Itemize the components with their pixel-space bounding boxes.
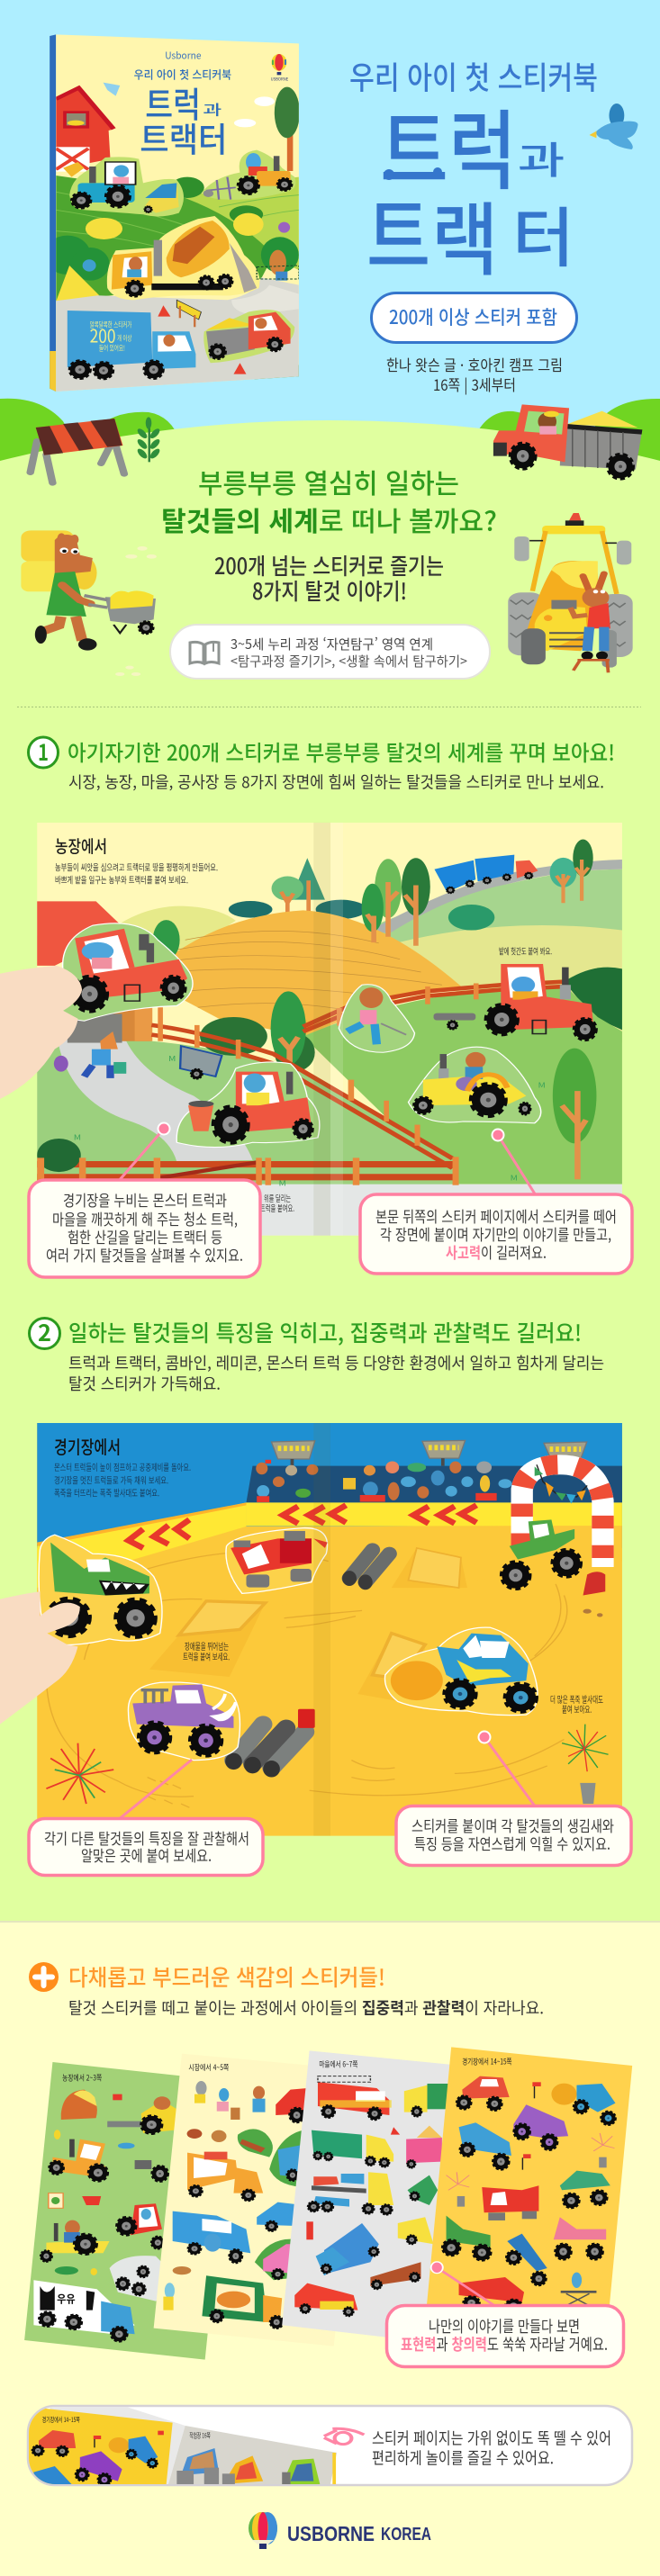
book cover: 트랙터 bbox=[140, 113, 227, 162]
book cover bbox=[44, 34, 303, 393]
subheading bbox=[214, 549, 444, 607]
photo: sticker pages: 경기장에서 14~15쪽 bbox=[42, 2415, 80, 2424]
callout arrow: right bbox=[479, 1732, 536, 1807]
panel: section 2 bbox=[0, 1316, 631, 1876]
book cover: Usborne bbox=[165, 48, 201, 62]
text: no scissors bbox=[372, 2427, 611, 2470]
main title: tractor: 트 bbox=[366, 171, 430, 291]
sticker 2 bbox=[176, 1062, 320, 1148]
callout: left text: 험한 산길을 달리는 트랙터 등 bbox=[68, 1225, 222, 1247]
sheet: farm: 농장에서 2~3쪽 bbox=[62, 2073, 102, 2084]
illustration: dog with wheelbarrow bbox=[21, 530, 157, 676]
background: sky bbox=[0, 0, 660, 477]
main title: tractor bbox=[366, 171, 574, 292]
book spread: farm: M bbox=[278, 1177, 286, 1188]
badge: 200+ stickers bbox=[371, 293, 576, 342]
logo: Usborne Korea: USBORNE bbox=[287, 2522, 375, 2545]
book cover: 과 bbox=[203, 99, 222, 119]
sticker 1 bbox=[61, 923, 194, 1022]
sticker: purple rhino bbox=[128, 1682, 240, 1761]
sheet: stadium bbox=[427, 2047, 632, 2304]
badge: 200+ stickers: 200개 이상 스티커 포함 bbox=[389, 303, 557, 330]
text: no scissors: 스티커 페이지는 가위 없이도 똑 뗄 수 있어 bbox=[372, 2427, 611, 2450]
callout: curriculum link bbox=[170, 625, 490, 679]
sticker: dump blue bbox=[384, 1627, 538, 1716]
background: left and right hills bbox=[0, 399, 660, 468]
book spread: stadium: 몬스터 트럭들이 높이 점프하고 공중제비를 돌아요. bbox=[54, 1460, 191, 1473]
sheet: market: 시장에서 4~5쪽 bbox=[188, 2062, 230, 2073]
icon: dump truck bbox=[493, 404, 642, 479]
callout: right text: 사고력이 길러져요. bbox=[446, 1240, 547, 1263]
book cover: 트럭 bbox=[145, 77, 201, 128]
number badge 2: 2 bbox=[38, 1316, 51, 1348]
heading: intro: 탈것들의 세계로 떠나 볼까요? bbox=[161, 500, 497, 539]
sticker: red truck bbox=[226, 1528, 328, 1593]
heading 1: 아기자기한 200개 스티커로 부릉부릉 탈것의 세계를 꾸며 보아요! bbox=[68, 735, 615, 767]
callout: left text: 각기 다른 탈것들의 특징을 잘 관찰해서 bbox=[44, 1826, 249, 1849]
book spread: stadium: 트럭을 붙여 보세요. bbox=[183, 1649, 230, 1663]
callout: right text: 본문 뒤쪽의 스티커 페이지에서 스티커를 떼어 bbox=[375, 1204, 617, 1227]
sticker 4 bbox=[408, 1047, 541, 1123]
icon: balloon bbox=[249, 2512, 277, 2549]
subheading: 8가지 탈것 이야기! bbox=[252, 574, 407, 607]
panel: section 1 bbox=[0, 735, 632, 1277]
background: cream page bbox=[0, 1921, 660, 2576]
callout: left text: 경기장을 누비는 몬스터 트럭과 bbox=[63, 1188, 227, 1211]
credits bbox=[386, 353, 563, 395]
logo: Usborne Korea: KOREA bbox=[381, 2525, 431, 2544]
description 2: 탈것 스티커가 가득해요. bbox=[68, 1372, 221, 1395]
icon: plant bbox=[136, 417, 161, 462]
callout: curriculum link: <탐구과정 즐기기>, <생활 속에서 탐구하기> bbox=[231, 652, 467, 671]
icon: pink scribble arrow bbox=[324, 2428, 364, 2445]
main title: truck and: 과 bbox=[518, 131, 565, 185]
sticker sheets bbox=[24, 2047, 632, 2360]
book spread: stadium: 폭죽을 터뜨리는 폭죽 발사대도 붙여요. bbox=[54, 1485, 159, 1500]
panel: hero bbox=[44, 34, 638, 395]
book cover: USBORNE bbox=[271, 76, 288, 82]
sheet: town: 마을에서 6~7쪽 bbox=[319, 2059, 358, 2070]
panel: peel-off pages bbox=[27, 2406, 632, 2486]
series title: 우리 아이 첫 스티커북 bbox=[349, 53, 598, 99]
book cover: 200 bbox=[90, 322, 116, 348]
hand bbox=[0, 966, 82, 1099]
book spread: farm: M bbox=[538, 1079, 546, 1090]
callout: left text: 마을을 깨끗하게 해 주는 청소 트럭, bbox=[52, 1207, 238, 1229]
callout: left text bbox=[29, 1180, 260, 1277]
callout: left text bbox=[29, 1818, 263, 1876]
callout: right text: 스티커를 붙이며 각 탈것들의 생김새와 bbox=[411, 1814, 614, 1836]
panel: stickers section bbox=[24, 1960, 632, 2549]
description 1: 시장, 농장, 마을, 공사장 등 8가지 장면에 힘써 일하는 탈것들을 스티커로 만나 보세요. bbox=[68, 770, 604, 794]
text: no scissors: 편리하게 놀이를 즐길 수 있어요. bbox=[372, 2446, 554, 2470]
sheet: farm bbox=[24, 2062, 208, 2360]
credits: 한나 왓슨 글 · 호아킨 캠프 그림 bbox=[386, 353, 563, 375]
description 2 bbox=[68, 1351, 604, 1395]
callout: expressive skills: 표현력과 창의력도 쑥쑥 자라날 거예요. bbox=[401, 2333, 608, 2355]
panel: intro bbox=[21, 404, 642, 679]
book spread: farm bbox=[0, 823, 622, 1236]
icon: open book bbox=[190, 642, 219, 663]
book spread: farm: 농장에서 bbox=[55, 833, 107, 858]
icon: orange plus bbox=[29, 1962, 59, 1992]
book spread: farm: 트럭을 붙여요. bbox=[260, 1202, 294, 1214]
callout: curriculum link: 3~5세 누리 과정 ‘자연탐구’ 영역 연계 bbox=[231, 635, 433, 653]
heading: intro: 부릉부릉 열심히 일하는 bbox=[198, 462, 459, 501]
background: green page bbox=[0, 420, 660, 1921]
book spread: farm: 농부들이 씨앗을 심으려고 트랙터로 땅을 평평하게 만들어요. bbox=[55, 860, 218, 873]
callout arrow: left bbox=[118, 1760, 192, 1820]
book spread: farm: 위를 달리는 bbox=[264, 1192, 291, 1204]
book spread: stadium: 붙여 보아요. bbox=[562, 1702, 592, 1716]
book cover: 알록달록한 스티커가 bbox=[90, 319, 131, 329]
callout: right text bbox=[360, 1194, 632, 1274]
book spread: stadium: 경기장에서 bbox=[54, 1433, 121, 1459]
sheet: stadium: 경기장에서 14~15쪽 bbox=[462, 2056, 512, 2067]
description 2: 트럭과 트랙터, 콤바인, 레미콘, 몬스터 트럭 등 다양한 환경에서 일하고 힘차게 달리는 bbox=[68, 1351, 604, 1374]
heading: stickers: 다채롭고 부드러운 색감의 스티커들! bbox=[68, 1960, 385, 1993]
callout: right text: 각 장면에 붙이며 자기만의 이야기를 만들고, bbox=[380, 1222, 611, 1245]
book spread: stadium: 경기장을 멋진 트럭들로 가득 채워 보세요. bbox=[54, 1473, 168, 1487]
photo: sticker pages bbox=[27, 2407, 337, 2486]
book spread: farm: M bbox=[511, 1172, 518, 1183]
book spread: farm: 바쁘게 밭을 일구는 농부와 트랙터를 붙여 보세요. bbox=[55, 873, 188, 886]
number badge 2 bbox=[29, 1316, 59, 1348]
callout arrow: left bbox=[118, 1123, 169, 1182]
credits: 16쪽 | 3세부터 bbox=[433, 373, 516, 395]
description: stickers: 탈것 스티커를 떼고 붙이는 과정에서 아이들의 집중력과 관찰력이 자라나요. bbox=[68, 1996, 544, 2020]
book cover: 개 이상 bbox=[117, 332, 131, 343]
icon: blue bird bbox=[589, 104, 638, 149]
logo: Usborne Korea bbox=[249, 2512, 431, 2549]
book spread: farm: 밭에 헛간도 붙여 봐요. bbox=[499, 945, 552, 958]
book spread: stadium: 장애물을 뛰어넘는 bbox=[185, 1639, 229, 1653]
main title: tractor: 터 bbox=[512, 187, 574, 281]
callout: left text: 알맞은 곳에 붙여 보세요. bbox=[81, 1843, 212, 1866]
icon: road barrier bbox=[31, 419, 124, 483]
sticker 3 bbox=[339, 985, 414, 1052]
sticker: green croc bbox=[39, 1535, 162, 1644]
book spread: stadium bbox=[0, 1423, 622, 1836]
book cover: 들어 있어요! bbox=[99, 342, 125, 353]
number badge 1 bbox=[29, 735, 58, 768]
main title: tractor: 랙 bbox=[431, 177, 498, 292]
sheet: market bbox=[153, 2063, 306, 2333]
book cover: 우리 아이 첫 스티커북 bbox=[134, 67, 231, 83]
heading: intro bbox=[161, 462, 497, 539]
callout: expressive skills bbox=[387, 2306, 623, 2367]
callout: expressive skills: 나만의 이야기를 만들다 보면 bbox=[429, 2315, 580, 2337]
arrow: sticker pointer bbox=[431, 2262, 494, 2306]
sheet: town bbox=[282, 2050, 450, 2337]
hand 2 bbox=[0, 1591, 80, 1725]
illustration: yellow tractor and rabbit bbox=[508, 513, 633, 672]
subheading: 200개 넘는 스티커로 즐기는 bbox=[214, 549, 444, 581]
callout: right text: 특징 등을 자연스럽게 익힐 수 있지요. bbox=[414, 1832, 610, 1854]
sheet: farm: 우유 bbox=[57, 2291, 76, 2306]
heading 2: 일하는 탈것들의 특징을 익히고, 집중력과 관찰력도 길러요! bbox=[68, 1316, 582, 1348]
book spread: farm: M bbox=[168, 1053, 176, 1064]
number badge 1: 1 bbox=[38, 735, 49, 768]
callout: left text: 여러 가지 탈것들을 살펴볼 수 있지요. bbox=[46, 1243, 243, 1265]
main title: truck and: 트럭 bbox=[380, 82, 517, 207]
photo: sticker pages: 작업장 16쪽 bbox=[189, 2430, 211, 2440]
callout arrow: right bbox=[492, 1129, 536, 1195]
callout: right text bbox=[396, 1806, 631, 1865]
book spread: farm: M bbox=[74, 1131, 81, 1142]
book spread: stadium: 더 많은 폭죽 발사대도 bbox=[550, 1692, 603, 1706]
